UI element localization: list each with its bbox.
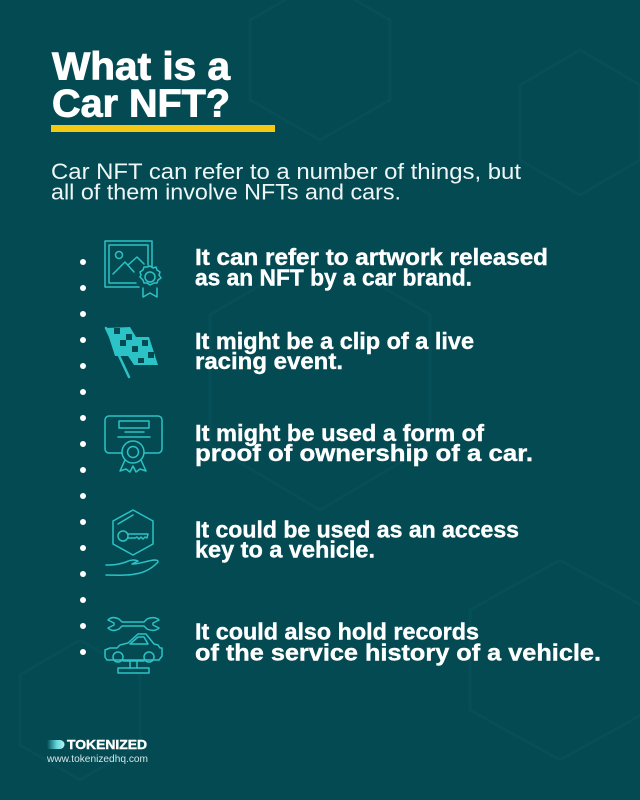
- icon: car service with wrench: [105, 618, 162, 673]
- text: racing clip: racing event.: [195, 348, 343, 374]
- intro text: all of them involve NFTs and cars.: [51, 180, 401, 204]
- title: What is a: [52, 46, 230, 88]
- text: artwork: as an NFT by a car brand.: [195, 264, 472, 290]
- yellow title underline: [51, 125, 275, 132]
- title: [52, 46, 230, 126]
- text: service history: [195, 618, 601, 666]
- text: racing clip: It might be a clip of a live: [195, 328, 474, 354]
- vertical dotted line: [80, 259, 86, 655]
- intro text: Car NFT can refer to a number of things, but: [51, 159, 522, 184]
- text: proof of ownership: It might be used a form of: [195, 420, 484, 446]
- icon: checkered racing flag: [106, 327, 158, 377]
- logo: [46, 738, 148, 765]
- text: racing clip: [195, 328, 474, 374]
- text: proof of ownership: [195, 420, 533, 466]
- text: access key: [195, 516, 519, 562]
- text: artwork: [195, 244, 548, 290]
- text: access key: key to a vehicle.: [195, 536, 375, 562]
- intro text: [51, 159, 522, 204]
- icon: access key in hand: [106, 510, 158, 575]
- icon: ownership certificate: [105, 416, 162, 472]
- text: artwork: It can refer to artwork released: [195, 244, 548, 270]
- icon: framed artwork with badge: [105, 241, 161, 297]
- title: Car NFT?: [52, 82, 230, 126]
- logo: TOKENIZED: [67, 738, 147, 752]
- text: service history: It could also hold records: [195, 618, 479, 644]
- text: proof of ownership: proof of ownership of a car.: [195, 440, 533, 466]
- text: service history: of the service history of a vehicle.: [195, 640, 601, 666]
- logo: www.tokenizedhq.com: [46, 754, 148, 765]
- text: access key: It could be used as an access: [195, 516, 519, 542]
